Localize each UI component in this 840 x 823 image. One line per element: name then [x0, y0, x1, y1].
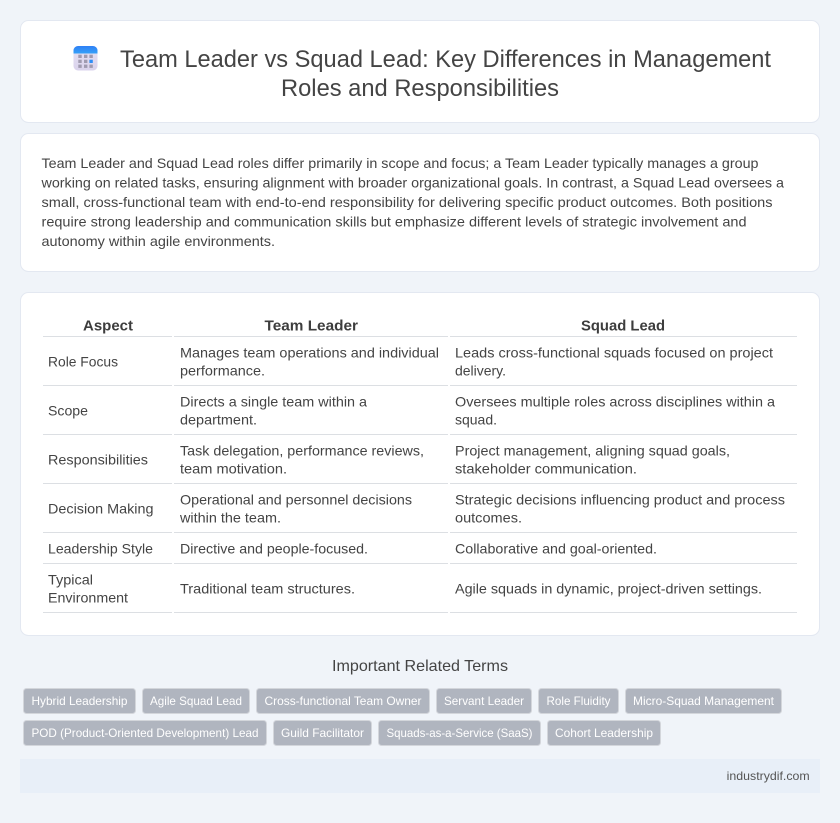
- table header row: Aspect: [83, 318, 133, 334]
- table row: decision making: outcomes.: [455, 510, 522, 526]
- table row: scope: [43, 394, 797, 435]
- table row: responsibilities: Responsibilities: [48, 452, 148, 468]
- table row: responsibilities: stakeholder communication.: [455, 460, 637, 476]
- related terms chips: Hybrid Leadership: [32, 694, 128, 708]
- table row: typical environment: Traditional team structures.: [180, 580, 355, 596]
- table row: scope: department.: [180, 412, 257, 428]
- table row: role focus: delivery.: [455, 362, 506, 378]
- related terms chips: Cross-functional Team Owner: [264, 694, 422, 708]
- related terms chips: Agile Squad Lead: [150, 694, 242, 708]
- title: Team Leader vs Squad Lead: Key Differences in Management: [120, 46, 771, 73]
- text block: summary: autonomy within agile environments.: [42, 233, 275, 249]
- table row: decision making: [43, 492, 797, 533]
- text block: summary: Team Leader and Squad Lead roles differ primarily in scope and focus; a Team Leader typically manages a group: [42, 155, 759, 171]
- table row: role focus: Manages team operations and individual: [180, 344, 439, 360]
- related terms chips: Role Fluidity: [546, 694, 610, 708]
- table row: scope: Scope: [48, 402, 88, 418]
- text block: summary: working on related tasks, ensuring alignment with broader organizational goals. In contrast, a Squad Lead oversees a: [40, 174, 784, 190]
- icon: calendar: [74, 46, 98, 70]
- table row: decision making: Strategic decisions influencing product and process: [455, 492, 785, 508]
- table header row: Squad Lead: [581, 318, 665, 334]
- footer: industrydif.com: [727, 769, 810, 783]
- text block: summary: small, cross-functional team with end-to-end responsibility for delivering specific product outcomes. Both positions: [42, 194, 773, 210]
- text block: summary: [40, 155, 784, 249]
- table row: leadership style: Collaborative and goal-oriented.: [455, 540, 657, 556]
- table row: role focus: performance.: [180, 362, 265, 378]
- title: Roles and Responsibilities: [281, 75, 559, 102]
- related terms chips: POD (Product-Oriented Development) Lead: [32, 726, 258, 740]
- panel: summary paragraph: [20, 134, 820, 272]
- related terms chips: Guild Facilitator: [281, 726, 364, 740]
- table row: decision making: Decision Making: [48, 500, 154, 516]
- text block: summary: require strong leadership and communication skills but emphasize different levels of strategic involvement and: [42, 214, 746, 230]
- table header row: [43, 318, 797, 337]
- title: [120, 46, 771, 102]
- table row: leadership style: Leadership Style: [48, 540, 153, 556]
- table row: scope: Oversees multiple roles across disciplines within a: [455, 394, 775, 410]
- table header row: Team Leader: [264, 318, 358, 334]
- table row: responsibilities: Project management, aligning squad goals,: [455, 442, 730, 458]
- table row: leadership style: Directive and people-focused.: [180, 540, 368, 556]
- footer: [20, 759, 820, 793]
- table row: typical environment: [43, 572, 797, 613]
- table row: leadership style: [43, 540, 797, 564]
- panel: header: [20, 20, 820, 122]
- table row: role focus: Role Focus: [48, 354, 118, 370]
- related terms chips: [24, 688, 782, 746]
- related terms chips: Squads-as-a-Service (SaaS): [386, 726, 532, 740]
- table row: responsibilities: [43, 442, 797, 484]
- related terms chips: Cohort Leadership: [555, 726, 653, 740]
- table row: decision making: within the team.: [179, 510, 281, 526]
- table row: decision making: Operational and personnel decisions: [180, 492, 412, 508]
- related terms chips: Servant Leader: [444, 694, 524, 708]
- table row: role focus: Leads cross-functional squads focused on project: [455, 344, 773, 360]
- table row: typical environment: Environment: [48, 590, 128, 606]
- table row: responsibilities: Task delegation, performance reviews,: [180, 442, 424, 458]
- table row: responsibilities: team motivation.: [180, 460, 287, 476]
- table row: scope: Directs a single team within a: [180, 394, 367, 410]
- related terms chips: Micro-Squad Management: [633, 694, 775, 708]
- table row: typical environment: Typical: [48, 572, 93, 588]
- table row: role focus: [43, 344, 797, 386]
- heading: important related terms: Important Related Terms: [332, 658, 508, 675]
- table row: scope: squad.: [455, 412, 497, 428]
- panel: comparison table: [20, 292, 820, 636]
- table row: typical environment: Agile squads in dynamic, project-driven settings.: [455, 580, 762, 596]
